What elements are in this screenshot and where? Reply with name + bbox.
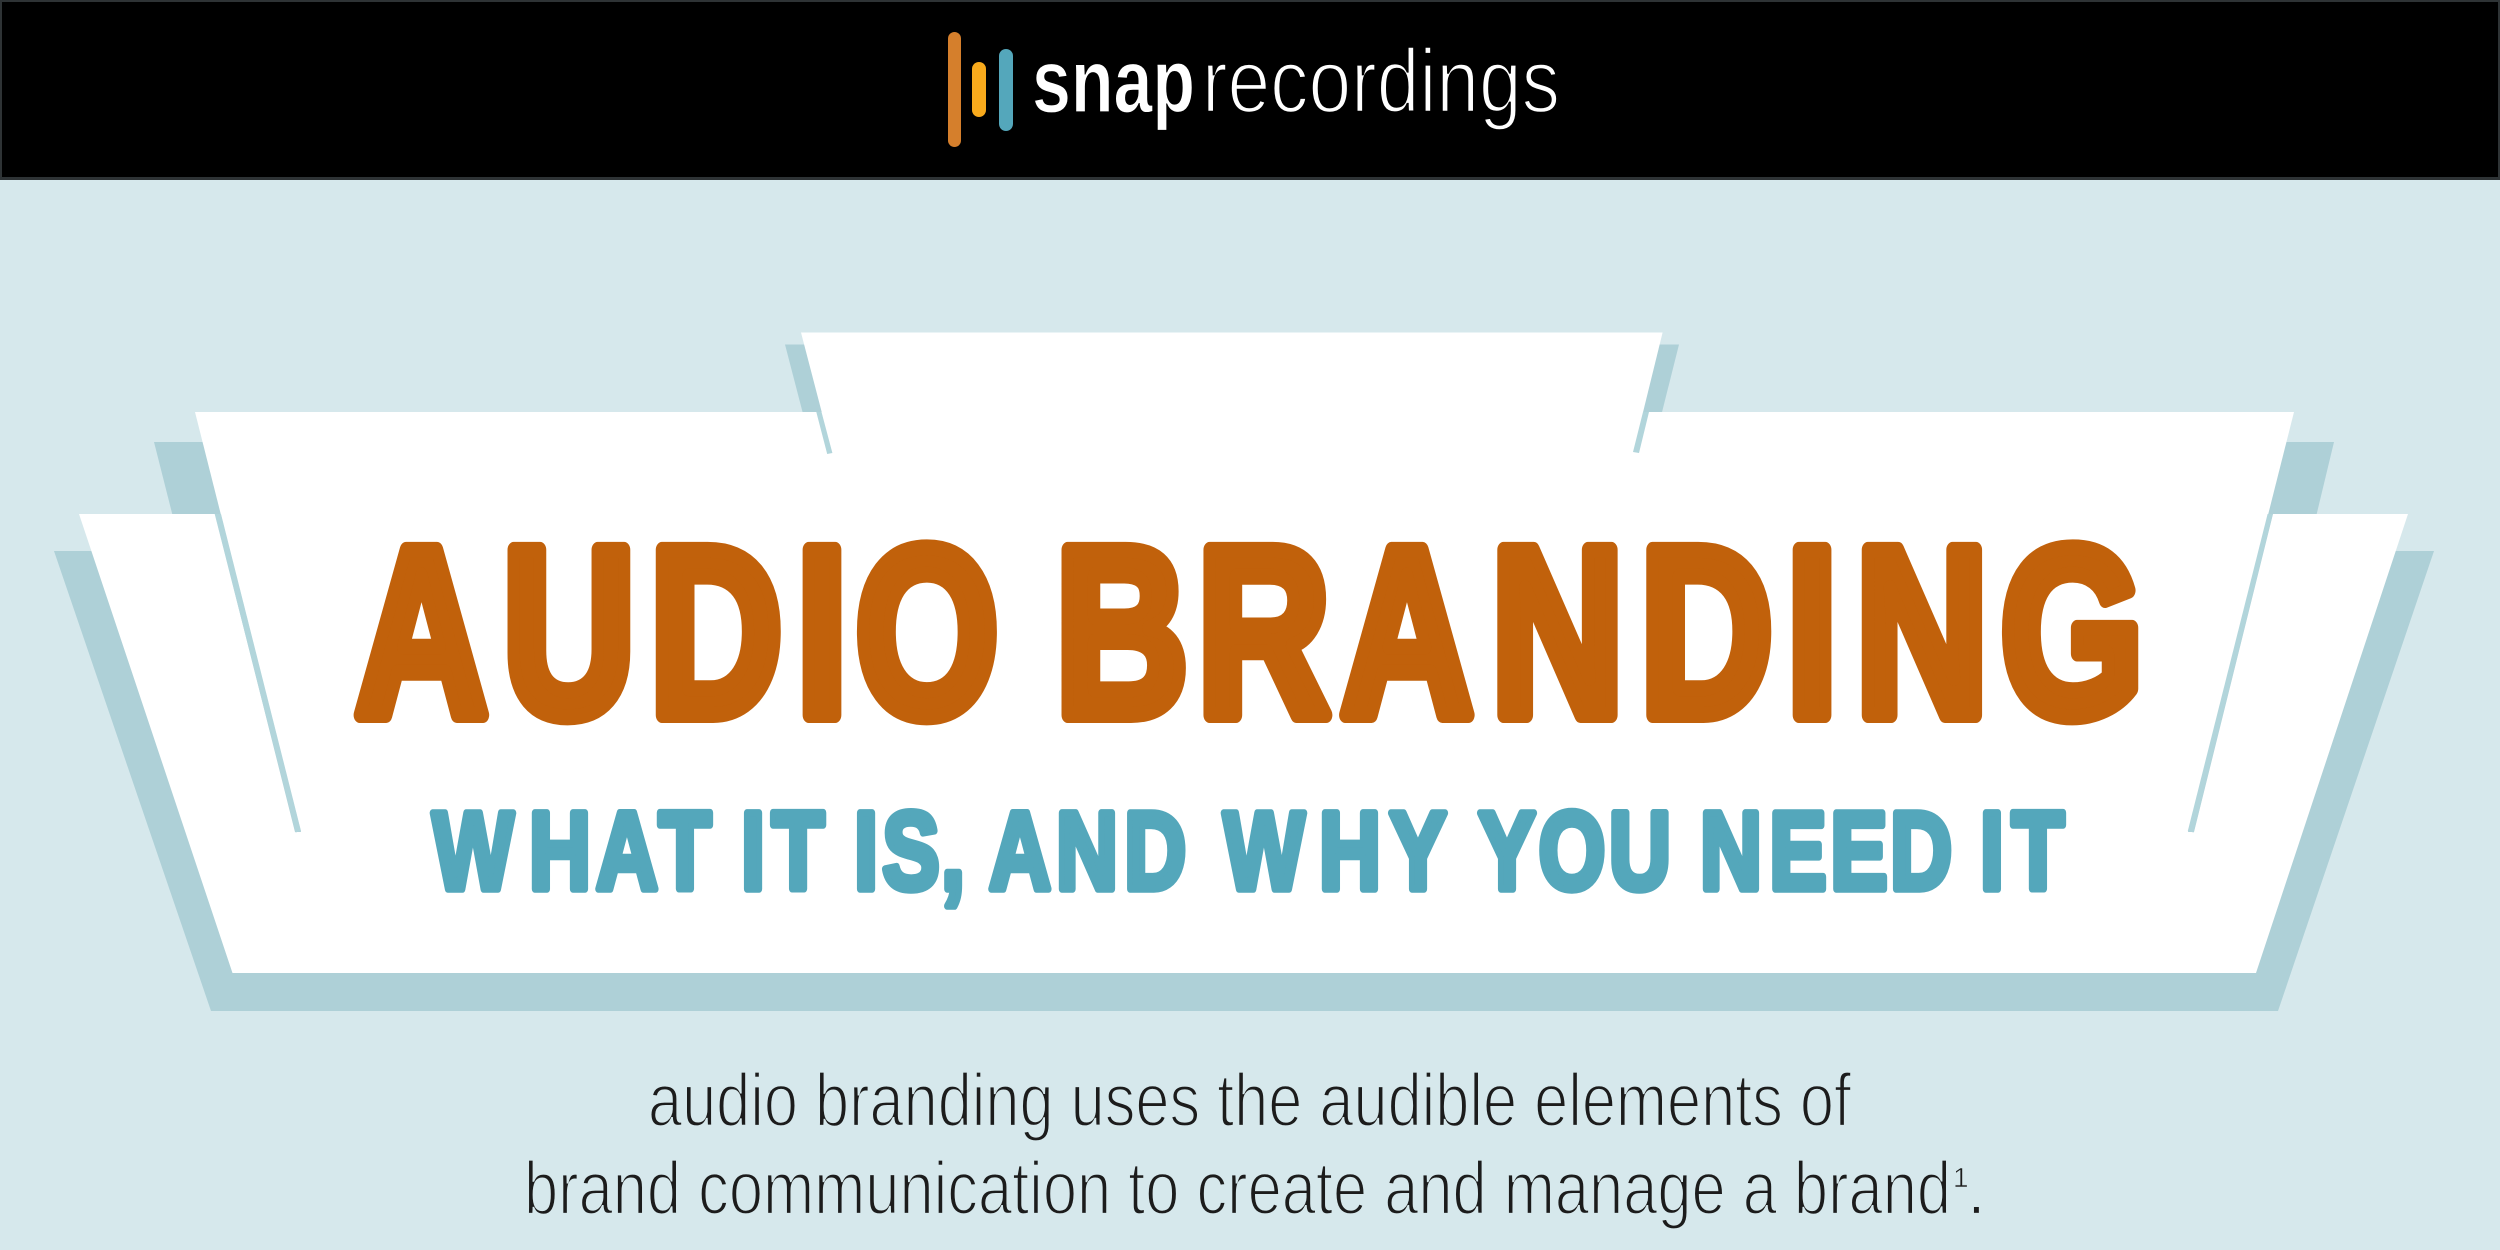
header bar [0,0,2500,180]
definition line 2: . [1966,1146,1987,1230]
banner shadow [54,344,2434,1011]
definition line 2: 1 [1953,1162,1969,1193]
title: AUDIO BRANDING [355,498,2144,767]
logo [948,32,1560,147]
banner fold lines [215,412,2273,832]
icon: sound bars [948,32,1013,147]
definition line 1: audio branding uses the audible elements of [648,1058,1851,1142]
subtitle: WHAT IT IS, AND WHY YOU NEED IT [433,790,2064,912]
definition text [524,1058,1987,1230]
logo wordmark: recordings [1202,32,1560,132]
logo wordmark: snap [1032,32,1195,132]
definition line 2: brand communication to create and manage a brand [524,1146,1951,1230]
title banner [54,332,2434,1011]
banner white panels [79,332,2408,973]
